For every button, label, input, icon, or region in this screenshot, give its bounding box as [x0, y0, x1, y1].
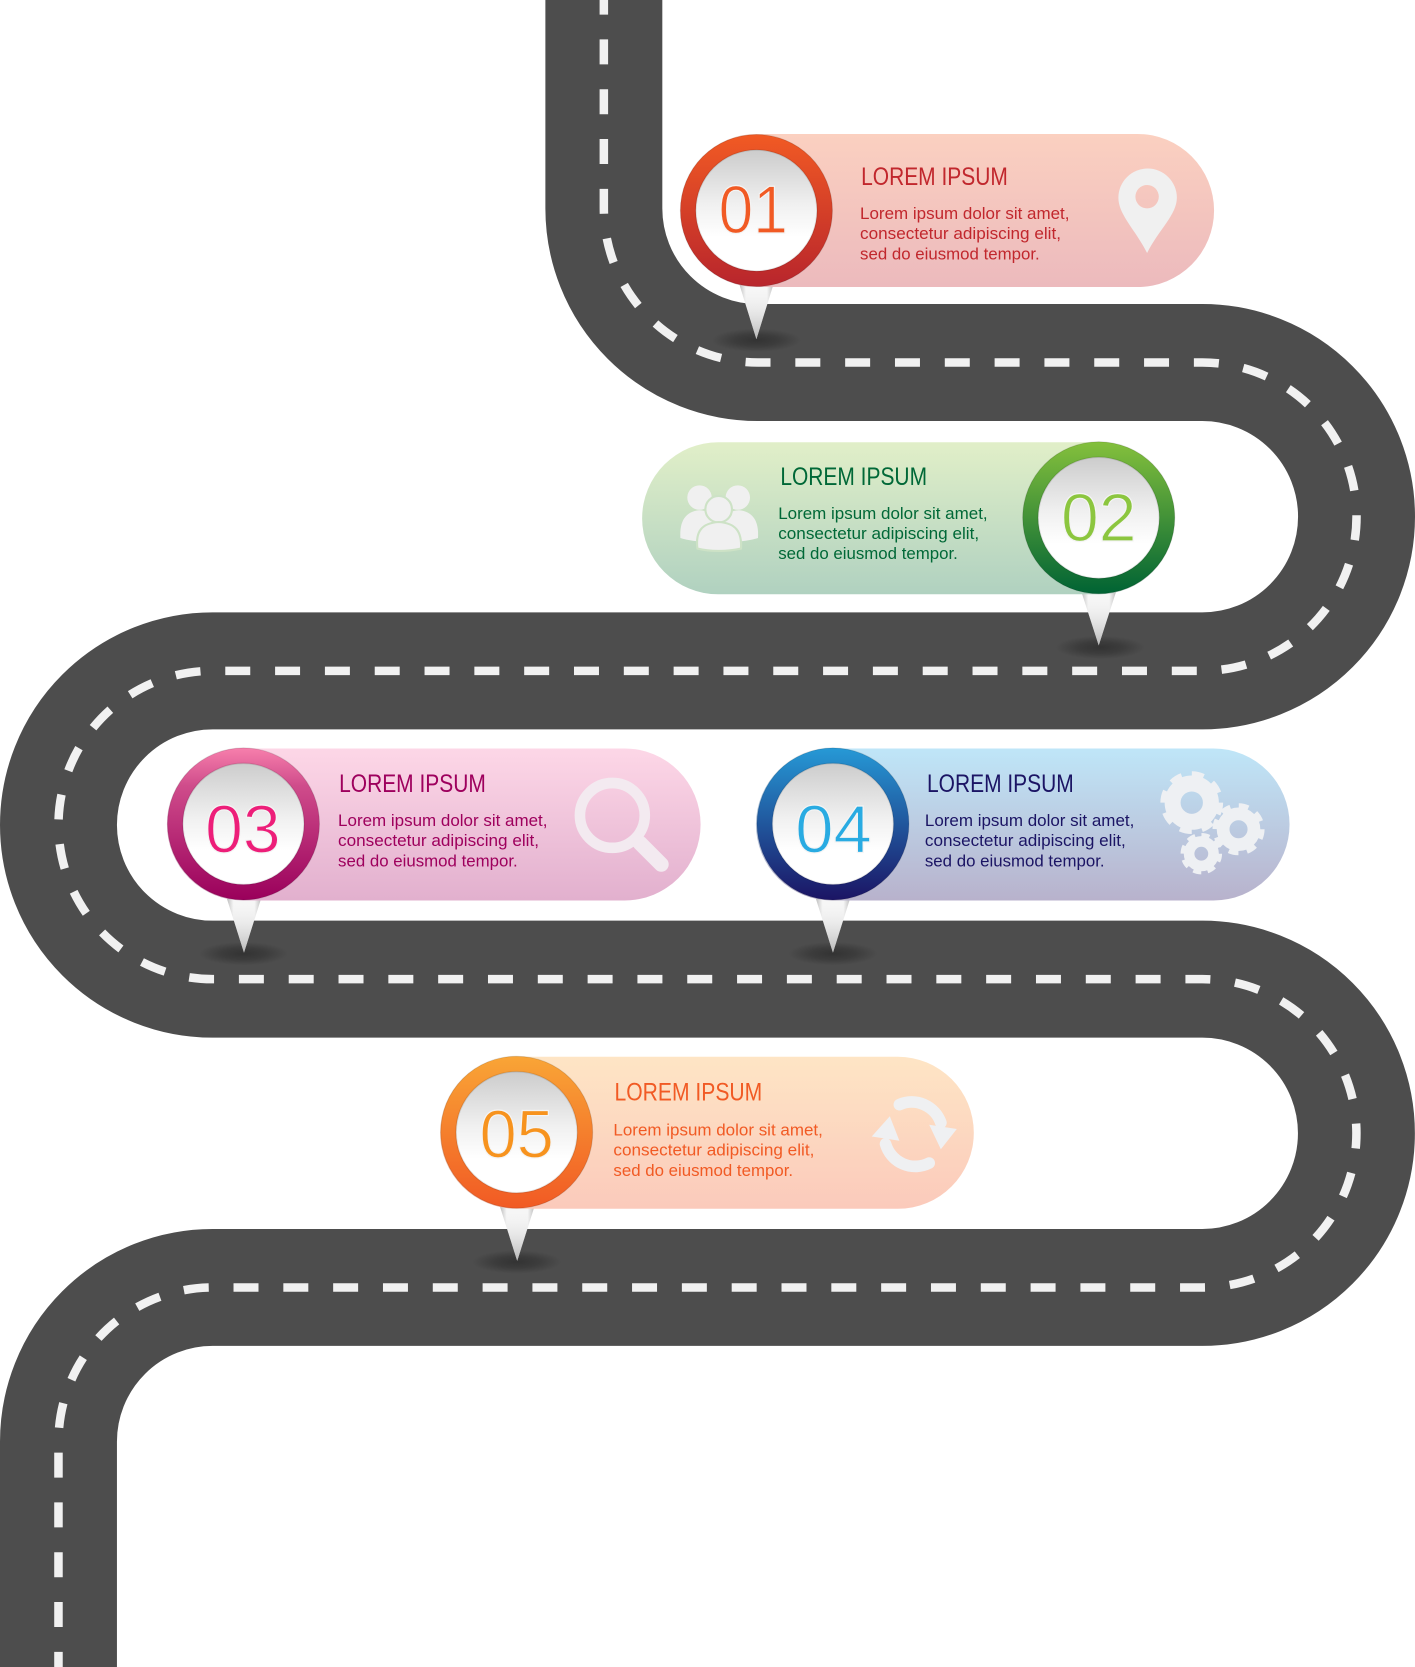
- banner 05: [440, 1057, 974, 1209]
- number badge 05: 05: [479, 1097, 554, 1173]
- body text 04: consectetur adipiscing elit,: [925, 831, 1126, 850]
- panel: step 03: [167, 748, 701, 965]
- icon: gears: [1164, 775, 1261, 872]
- number badge 04: [757, 748, 909, 900]
- body text 04: Lorem ipsum dolor sit amet,: [925, 811, 1134, 830]
- number badge 05: [441, 1056, 593, 1208]
- number badge 02: 02: [1061, 480, 1136, 556]
- body text 01: Lorem ipsum dolor sit amet,: [860, 204, 1069, 223]
- banner 01: [680, 134, 1214, 287]
- pin shadow 01: [712, 329, 801, 352]
- body text 02: [778, 504, 988, 563]
- body text 02: consectetur adipiscing elit,: [778, 524, 979, 543]
- body text 02: sed do eiusmod tempor.: [778, 544, 958, 563]
- number badge 01: 01: [719, 172, 788, 248]
- heading 04: LOREM IPSUM: [927, 770, 1074, 798]
- body text 04: sed do eiusmod tempor.: [925, 851, 1105, 870]
- body text 05: consectetur adipiscing elit,: [613, 1141, 814, 1160]
- icon: map pin: [1118, 169, 1177, 253]
- pin shadow 05: [472, 1250, 561, 1274]
- heading 03: LOREM IPSUM: [339, 770, 486, 798]
- pin pointer 02: [1081, 591, 1116, 645]
- body text 02: Lorem ipsum dolor sit amet,: [778, 504, 988, 523]
- body text 05: [613, 1120, 823, 1180]
- banner 04: [756, 748, 1290, 900]
- number badge 01: [680, 134, 832, 287]
- panel: step 01: [680, 134, 1214, 352]
- heading 05: LOREM IPSUM: [614, 1078, 762, 1106]
- pin pointer 03: [226, 897, 262, 953]
- number badge 03: 03: [205, 792, 281, 868]
- body text 01: consectetur adipiscing elit,: [860, 224, 1061, 243]
- number badge 03: [167, 748, 319, 900]
- pin pointer 01: [739, 283, 774, 339]
- body text 05: Lorem ipsum dolor sit amet,: [613, 1120, 823, 1139]
- body text 04: [925, 811, 1134, 870]
- body text 01: sed do eiusmod tempor.: [860, 244, 1040, 263]
- panel: step 04: [756, 748, 1290, 965]
- body text 03: consectetur adipiscing elit,: [338, 831, 539, 850]
- banner 03: [167, 748, 701, 900]
- body text 03: Lorem ipsum dolor sit amet,: [338, 811, 548, 830]
- body text 05: sed do eiusmod tempor.: [613, 1161, 793, 1180]
- icon: magnifier: [580, 783, 661, 864]
- pin pointer 05: [500, 1206, 535, 1261]
- pin pointer 04: [815, 897, 850, 953]
- icon: people: [680, 485, 758, 551]
- panel: step 05: [440, 1056, 974, 1274]
- number badge 04: 04: [795, 792, 872, 868]
- body text 03: sed do eiusmod tempor.: [338, 851, 518, 870]
- heading 01: LOREM IPSUM: [861, 163, 1008, 191]
- panel: step 02: [642, 442, 1175, 659]
- icon: refresh arrows: [872, 1102, 957, 1166]
- body text 01: [860, 204, 1069, 263]
- banner 02: [642, 442, 1175, 594]
- pin shadow 03: [199, 942, 288, 965]
- body text 03: [338, 811, 548, 870]
- heading 02: LOREM IPSUM: [780, 463, 927, 491]
- pin shadow 02: [1056, 636, 1145, 659]
- number badge 02: [1023, 442, 1175, 594]
- pin shadow 04: [788, 942, 878, 965]
